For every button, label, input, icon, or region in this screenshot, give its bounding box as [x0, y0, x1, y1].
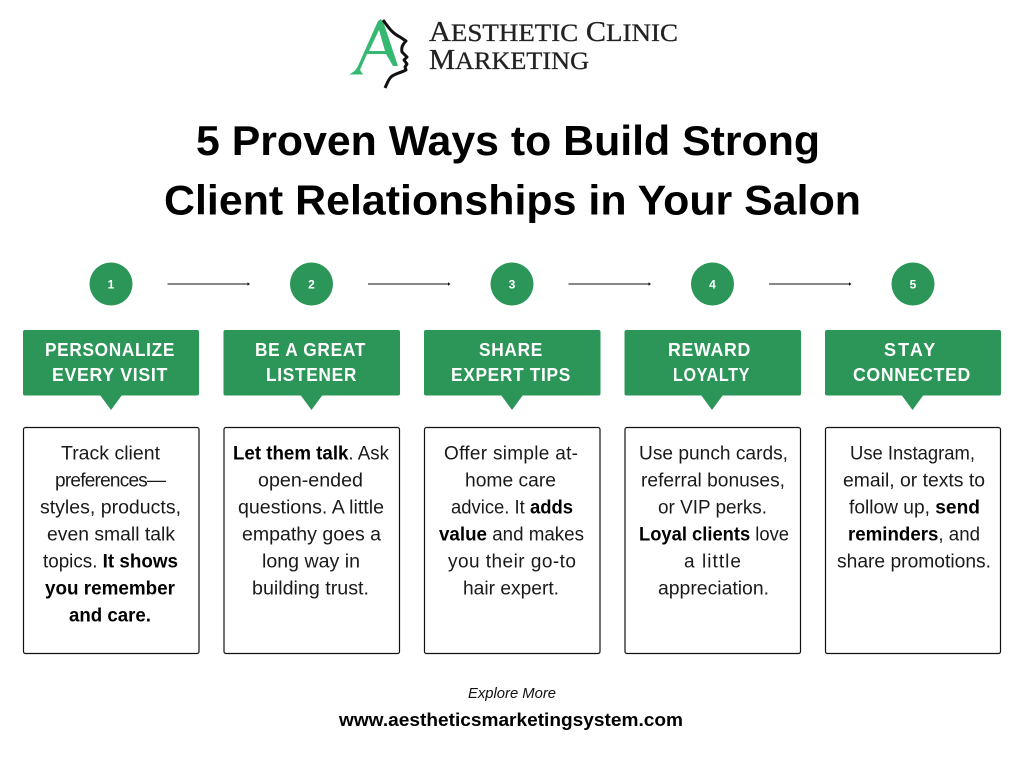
- heading callout: EXPERT TIPS: [451, 365, 571, 385]
- heading callout: PERSONALIZE: [45, 340, 175, 360]
- step 3 number: 3: [509, 278, 516, 292]
- step 5 number: [892, 262, 934, 306]
- logo text: MARKETING: [429, 45, 589, 76]
- body card: building trust.: [252, 578, 369, 600]
- title: 5 Proven Ways to Build Strong: [196, 117, 820, 164]
- body card: Offer simple at-: [444, 444, 578, 464]
- body card: a little: [684, 552, 741, 572]
- footer: website url: www.aestheticsmarketingsystem.com: [338, 709, 683, 730]
- body card: open-ended: [258, 470, 363, 492]
- body card: advice. It adds: [451, 498, 573, 518]
- heading callout: [825, 330, 1001, 410]
- body card: Let them talk. Ask: [233, 444, 389, 464]
- body card: you their go-to: [448, 552, 576, 572]
- step 4 number: [691, 262, 734, 306]
- step 4 number: 4: [709, 278, 716, 292]
- body card: [826, 428, 1000, 654]
- body card: even small talk: [47, 524, 175, 546]
- heading callout: STAY: [884, 340, 936, 360]
- body card: [424, 428, 600, 654]
- body card: you remember: [45, 578, 176, 600]
- step 3 number: [490, 262, 534, 306]
- panel: personalize every visit: [23, 330, 199, 654]
- logo: [349, 17, 678, 88]
- body card: hair expert.: [463, 578, 559, 600]
- body card: share promotions.: [837, 552, 991, 572]
- body card: preferences—: [55, 470, 166, 492]
- icon: logo letter A with face profile: [349, 19, 407, 88]
- body card: questions. A little: [238, 498, 384, 518]
- body card: [625, 428, 800, 654]
- arrow 4 to 5: [769, 282, 852, 286]
- step 1 number: 1: [108, 278, 115, 292]
- body card: or VIP perks.: [658, 498, 767, 518]
- heading callout: CONNECTED: [853, 365, 971, 385]
- arrow 2 to 3: [368, 282, 450, 286]
- panel: stay connected: [825, 330, 1001, 654]
- arrow 3 to 4: [568, 282, 651, 286]
- step 2 number: [290, 262, 333, 306]
- body card: value and makes: [439, 524, 584, 546]
- step 5 number: 5: [910, 278, 917, 292]
- heading callout: [624, 330, 801, 410]
- body card: Track client: [61, 444, 161, 464]
- body card: styles, products,: [40, 498, 181, 518]
- step 1 number: [90, 262, 132, 306]
- step 2 number: 2: [308, 278, 315, 292]
- panel: reward loyalty: [624, 330, 801, 654]
- heading callout: LOYALTY: [673, 365, 750, 385]
- heading callout: [23, 330, 199, 410]
- heading callout: REWARD: [668, 340, 751, 360]
- title: [164, 117, 861, 224]
- body card: email, or texts to: [843, 470, 985, 492]
- heading callout: [224, 330, 400, 410]
- body card: and care.: [69, 606, 151, 626]
- body card: long way in: [262, 552, 360, 572]
- footer: explore more: Explore More: [468, 686, 556, 702]
- body card: home care: [465, 470, 556, 492]
- body card: [224, 428, 400, 654]
- body card: follow up, send: [849, 498, 980, 518]
- logo text: AESTHETIC CLINIC: [429, 17, 678, 48]
- body card: reminders, and: [848, 524, 980, 546]
- body card: Use punch cards,: [639, 444, 788, 464]
- body card: [24, 428, 199, 654]
- arrow 1 to 2: [168, 282, 250, 286]
- panel: share expert tips: [424, 330, 600, 654]
- heading callout: SHARE: [479, 340, 543, 360]
- panel: be a great listener: [224, 330, 400, 654]
- body card: topics. It shows: [43, 552, 178, 572]
- heading callout: [424, 330, 600, 410]
- body card: referral bonuses,: [641, 470, 785, 492]
- heading callout: EVERY VISIT: [52, 365, 168, 385]
- body card: empathy goes a: [242, 524, 381, 546]
- body card: appreciation.: [658, 578, 769, 600]
- title: Client Relationships in Your Salon: [164, 176, 861, 224]
- heading callout: BE A GREAT: [255, 340, 366, 360]
- body card: Loyal clients love: [639, 524, 789, 546]
- body card: Use Instagram,: [850, 444, 975, 464]
- heading callout: LISTENER: [266, 365, 357, 385]
- logo text: [429, 17, 678, 76]
